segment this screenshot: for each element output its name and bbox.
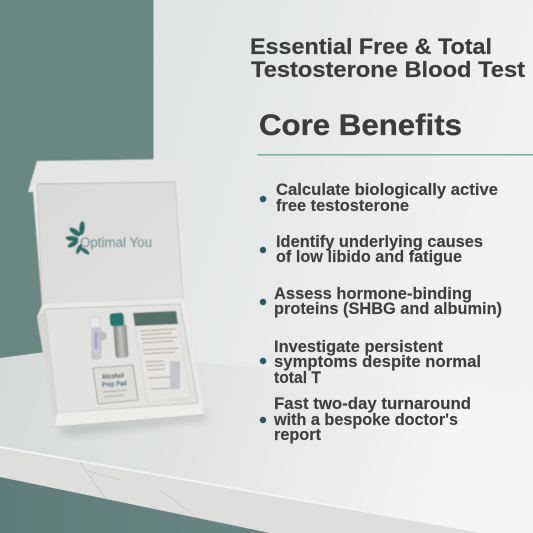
background: marble countertop bbox=[0, 350, 533, 533]
benefit 4 bbox=[260, 337, 481, 387]
benefit 5: report bbox=[274, 425, 321, 444]
item: instruction card bbox=[133, 311, 191, 402]
benefit 2 bbox=[260, 232, 483, 266]
box lid bbox=[28, 159, 191, 306]
item: alcohol prep pad bbox=[93, 365, 138, 404]
title: Essential Free & Total bbox=[250, 34, 492, 59]
benefit 1: Calculate biologically active bbox=[276, 180, 498, 199]
benefit 4: Investigate persistent bbox=[274, 337, 443, 356]
benefit 3 bbox=[260, 284, 502, 318]
background: teal wall panel bbox=[0, 0, 154, 365]
item: blood tube with green cap bbox=[109, 312, 129, 358]
benefit 2: of low libido and fatigue bbox=[276, 247, 462, 266]
item: alcohol prep pad: Prep Pad bbox=[102, 380, 127, 389]
benefit 1 bbox=[260, 180, 498, 215]
product: shadow under box bbox=[58, 414, 208, 436]
benefit 4: symptoms despite normal bbox=[274, 352, 481, 371]
box base bbox=[37, 300, 203, 427]
logo: Optimal You bbox=[65, 221, 152, 256]
benefit 3: Assess hormone-binding bbox=[274, 284, 472, 303]
benefit 3: proteins (SHBG and albumin) bbox=[274, 299, 502, 318]
benefit 5: Fast two-day turnaround bbox=[274, 394, 471, 413]
item: collection vial bbox=[90, 317, 107, 359]
benefit 5: with a bespoke doctor's bbox=[273, 410, 458, 429]
benefit list bbox=[260, 180, 502, 444]
benefit 4: total T bbox=[274, 368, 322, 387]
benefit 2: Identify underlying causes bbox=[276, 232, 483, 251]
logo: Optimal You: Optimal You bbox=[80, 235, 152, 250]
benefit 1: free testosterone bbox=[276, 196, 409, 215]
title: Testosterone Blood Test bbox=[251, 57, 526, 82]
heading: Core Benefits: Core Benefits bbox=[259, 109, 462, 142]
title bbox=[250, 34, 526, 82]
heading underline bbox=[257, 154, 533, 156]
product: test kit box bbox=[28, 159, 203, 427]
benefit 5 bbox=[260, 394, 471, 444]
item: alcohol prep pad: Alcohol bbox=[102, 372, 124, 381]
